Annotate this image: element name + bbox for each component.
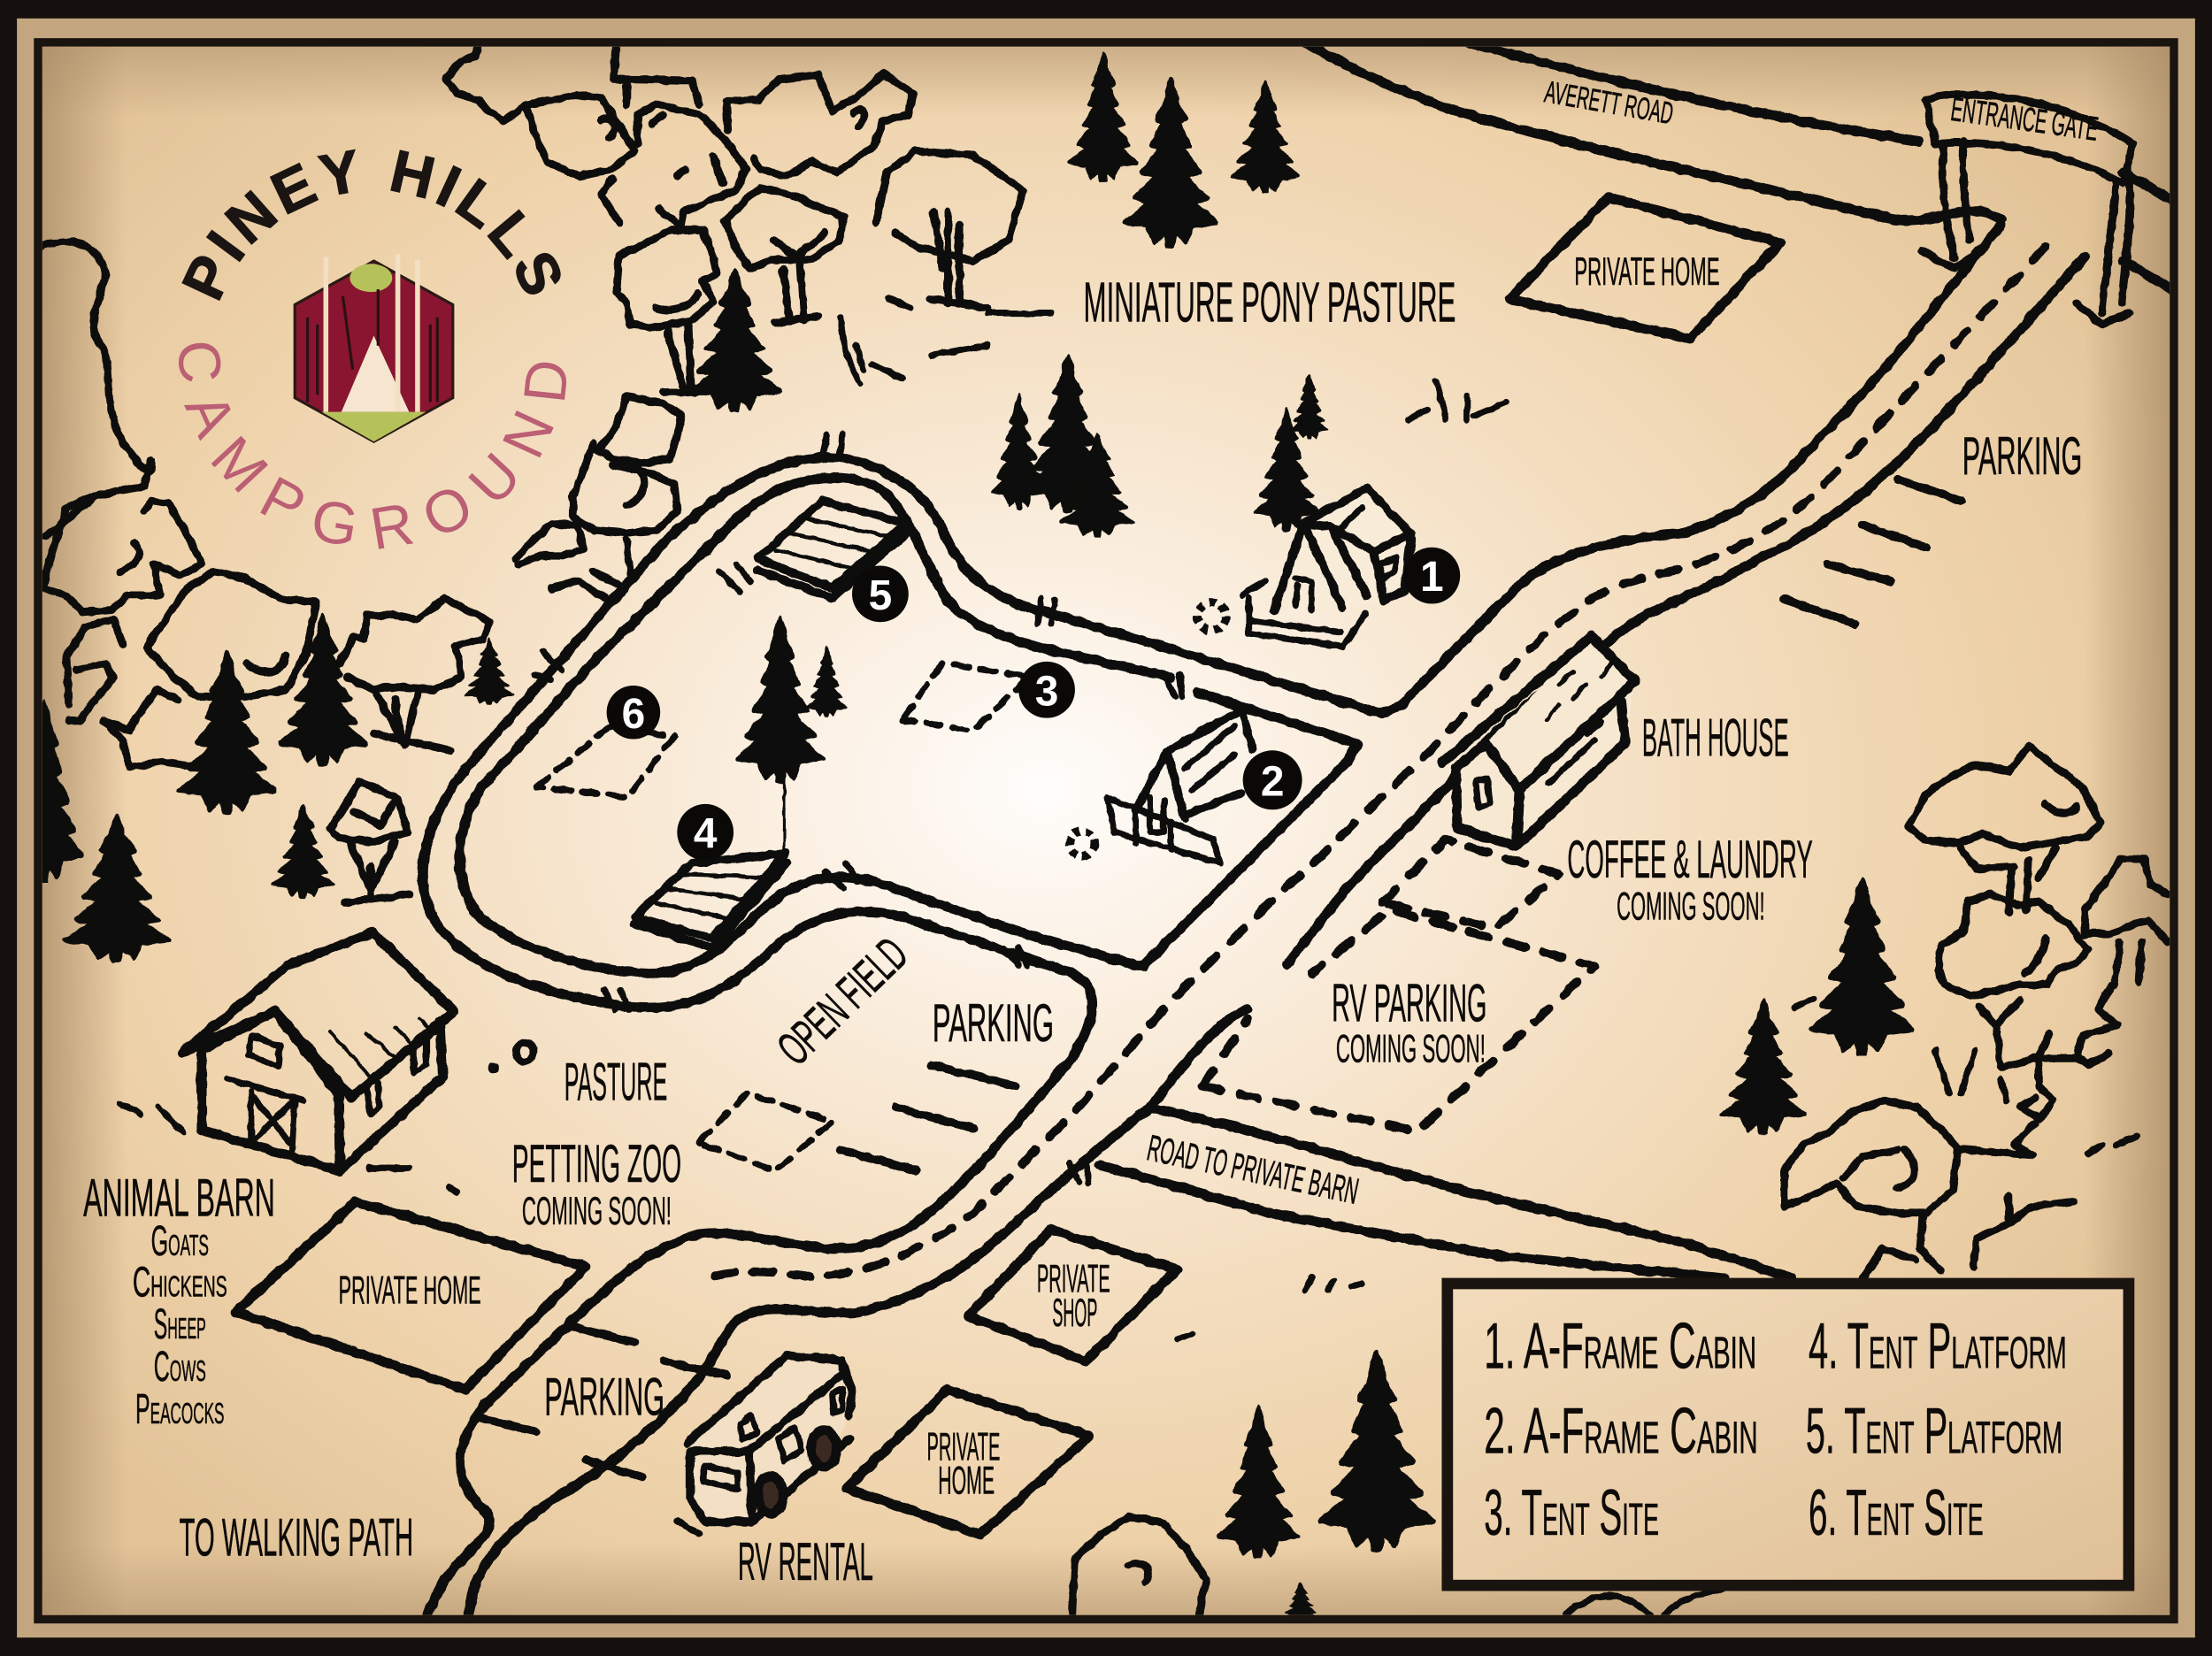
numbered badges: 2 [1261, 758, 1284, 805]
grass tufts [120, 313, 2137, 1535]
left cluster crown three [66, 619, 123, 721]
vignette edge bottom [42, 1545, 2170, 1615]
pasture dots [488, 1043, 534, 1073]
private home lot bottom [847, 1390, 1089, 1535]
tent site 3 [902, 663, 1030, 731]
right side vines [1961, 985, 2117, 1155]
numbered badges [607, 548, 1460, 861]
platform 4 [634, 854, 787, 948]
map labels: COMING SOON! [1336, 1028, 1486, 1071]
cabin 1 [1198, 488, 1410, 646]
private homes [235, 197, 1780, 1535]
map labels: PASTURE [565, 1052, 667, 1112]
dashed tent sites and RV areas [536, 663, 1594, 1170]
map labels: AVERETT ROAD [1542, 74, 1676, 131]
right small crown [2085, 859, 2169, 985]
RV rental vehicle [687, 1355, 852, 1522]
legend right column [1806, 1310, 2067, 1549]
bath house [1441, 636, 1635, 847]
logo subtitle arc: CAMPGROUND [179, 343, 566, 549]
numbered badges: 5 [869, 572, 892, 619]
map labels: Cows [154, 1344, 206, 1391]
vignette edge left [42, 47, 127, 1615]
numbered badges: 3 [1035, 668, 1058, 715]
legend right column: 6. Tent Site [1809, 1476, 1984, 1549]
map labels: Goats [151, 1218, 209, 1265]
map labels: PARKING [544, 1366, 664, 1426]
legend left column: 3. Tent Site [1484, 1476, 1659, 1549]
map labels: SHOP [1052, 1292, 1097, 1335]
legend left column [1484, 1310, 1758, 1549]
bottom bush [1072, 1516, 1206, 1615]
left cluster crown four [103, 690, 202, 767]
petting zoo area [698, 1093, 833, 1170]
map labels: PRIVATE [927, 1425, 1000, 1468]
map labels: PETTING ZOO [512, 1133, 681, 1193]
top left bushes [446, 42, 700, 176]
numbered badges: 6 [622, 691, 645, 738]
RV parking area [1202, 909, 1594, 1131]
coffee and laundry area [1382, 840, 1559, 928]
map labels: BATH HOUSE [1642, 708, 1789, 768]
legend left column: 1. A-Frame Cabin [1484, 1310, 1756, 1383]
tent site 6 [536, 726, 674, 797]
roads [423, 42, 2172, 1615]
left cluster crown two [147, 571, 316, 697]
top right cloud crown [726, 73, 913, 176]
entrance gate [1922, 95, 2133, 325]
tree left of pine [617, 230, 717, 392]
cabin 2 [1070, 709, 1263, 863]
map labels: COMING SOON! [1617, 886, 1765, 929]
map labels: ROAD TO PRIVATE BARN [1144, 1127, 1363, 1212]
map labels: ANIMAL BARN [83, 1167, 275, 1227]
map labels: PARKING [933, 993, 1054, 1053]
animal barn [183, 932, 454, 1170]
map labels: RV PARKING [1332, 972, 1486, 1032]
left cluster crown one [42, 460, 202, 612]
left edge tree outline [42, 242, 151, 536]
map labels: PARKING [1962, 426, 2082, 486]
lower tree stack [515, 396, 681, 598]
private shop lot [968, 1230, 1177, 1361]
map labels: Sheep [154, 1301, 206, 1348]
map labels: RV RENTAL [738, 1531, 873, 1591]
map labels: Chickens [133, 1259, 227, 1306]
private home lot top [1509, 197, 1780, 339]
map labels: PRIVATE HOME [339, 1269, 481, 1312]
legend left column: 2. A-Frame Cabin [1484, 1394, 1758, 1467]
vignette edge right [2085, 47, 2170, 1615]
right bush [1785, 1100, 2074, 1278]
dashed center line [698, 247, 2046, 1281]
map labels: TO WALKING PATH [179, 1507, 413, 1568]
bottom edge scrub [1566, 1587, 1728, 1615]
right large crown [1909, 747, 2101, 913]
main road right edge [1286, 257, 2085, 965]
vignette edge top [42, 47, 2170, 117]
logo hexagon emblem [295, 254, 453, 441]
legend box [1448, 1284, 2129, 1585]
map labels: COFFEE & LAUNDRY [1567, 829, 1813, 889]
main road left edge and outer loop [423, 226, 2001, 1615]
map labels: PRIVATE HOME [1574, 250, 1720, 294]
top centre crown [601, 104, 746, 227]
parking ticks [480, 479, 1961, 1476]
map labels: MINIATURE PONY PASTURE [1083, 271, 1455, 334]
Averett Road [1305, 42, 2172, 289]
map labels: Peacocks [135, 1386, 225, 1433]
map labels: COMING SOON! [522, 1190, 672, 1233]
road to private barn [1101, 1108, 1792, 1278]
private home lot left [235, 1202, 586, 1390]
numbered badges: 4 [694, 810, 718, 857]
numbered badges: 1 [1420, 554, 1444, 601]
map labels: OPEN FIELD [767, 927, 918, 1076]
map labels: PRIVATE [1037, 1258, 1110, 1301]
logo title arc: PINEY HILLS [181, 149, 561, 301]
right middle crown [1939, 894, 2088, 1068]
tree right of pines [340, 598, 489, 750]
tent platforms [634, 501, 906, 948]
map labels: HOME [938, 1460, 995, 1503]
single oak tree [876, 151, 1023, 308]
lower main road edge [468, 1008, 1248, 1615]
small round tree [330, 781, 409, 903]
inner loop island [459, 478, 1357, 973]
logo: Piney Hills Campground [179, 149, 566, 549]
connector lines to badges [783, 769, 785, 854]
tree with forked trunk [726, 188, 843, 323]
platform 5 [757, 501, 906, 598]
